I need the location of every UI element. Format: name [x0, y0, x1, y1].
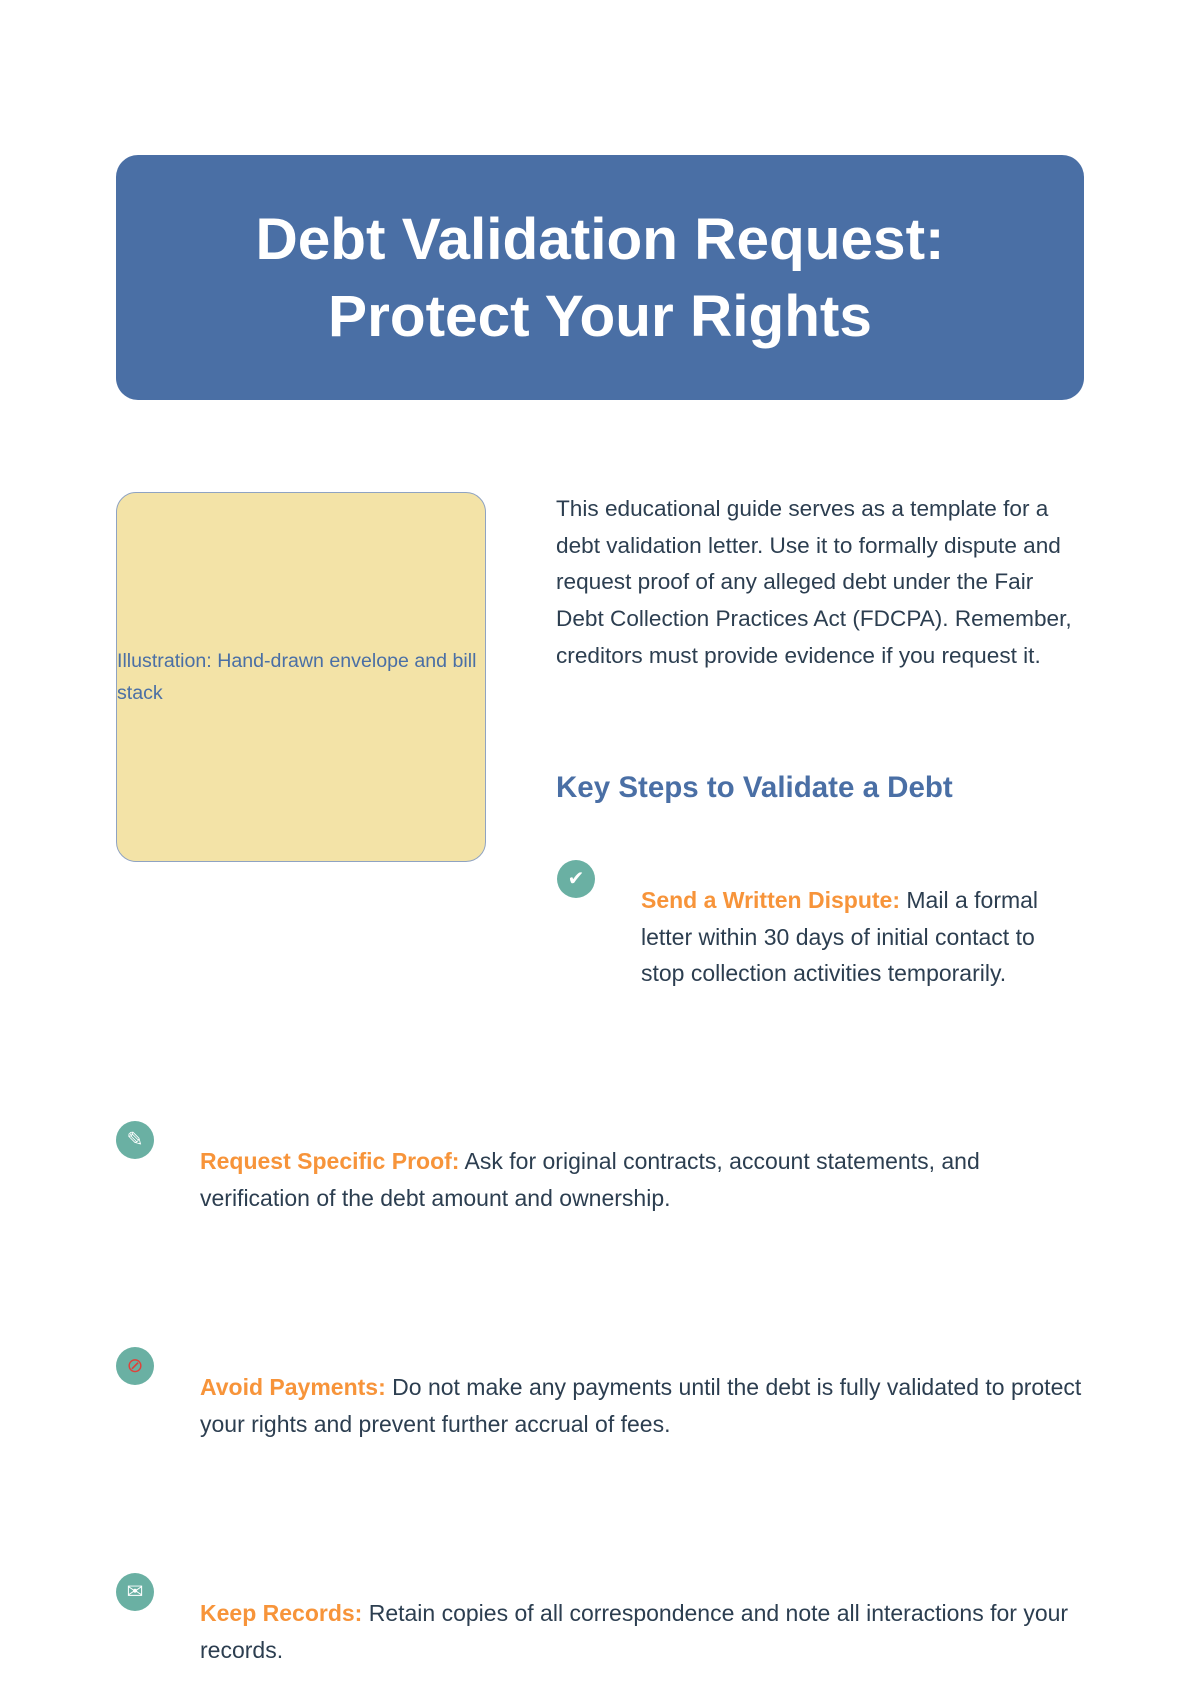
step 3 [116, 1347, 1082, 1437]
intro paragraph: creditors must provide evidence if you request it. [556, 643, 1041, 668]
step 4 text: records. [200, 1637, 283, 1663]
illustration placeholder [116, 492, 486, 862]
title banner [116, 155, 1084, 400]
step 3 text: Avoid Payments: Do not make any payments until the debt is fully validated to protect [200, 1374, 1081, 1400]
step 2 text: verification of the debt amount and ownership. [200, 1185, 671, 1211]
intro paragraph: Debt Collection Practices Act (FDCPA). Remember, [556, 606, 1072, 631]
intro paragraph [556, 496, 1072, 668]
step 4 text: Keep Records: Retain copies of all correspondence and note all interactions for your [200, 1600, 1068, 1626]
icon: no entry: ⊘ [127, 1355, 143, 1377]
intro paragraph: request proof of any alleged debt under the Fair [556, 569, 1033, 594]
icon: no entry [116, 1347, 154, 1385]
step 1 [557, 860, 1038, 986]
heading: key steps: Key Steps to Validate a Debt [556, 771, 953, 804]
step 4 text [200, 1600, 1068, 1663]
step 1 text: letter within 30 days of initial contact to [641, 924, 1035, 950]
step 2 text [200, 1148, 980, 1211]
icon: memo: ✎ [127, 1129, 143, 1151]
step 1 text [641, 887, 1038, 986]
intro paragraph: This educational guide serves as a template for a [556, 496, 1048, 521]
step 2 [116, 1121, 980, 1211]
step 1 text: Send a Written Dispute: Mail a formal [641, 887, 1038, 913]
title banner: Protect Your Rights [328, 284, 872, 348]
step 2 text: Request Specific Proof: Ask for original contracts, account statements, and [200, 1148, 980, 1174]
title banner: Debt Validation Request: [255, 206, 945, 272]
icon: envelope: ✉ [127, 1581, 143, 1603]
step 3 text [200, 1374, 1082, 1437]
step 4 [116, 1573, 1068, 1663]
icon: envelope [116, 1573, 154, 1611]
icon: check: ✔ [568, 868, 584, 890]
icon: check [557, 860, 595, 898]
icon: memo [116, 1121, 154, 1159]
illustration placeholder: Illustration: Hand-drawn envelope and bill stack [117, 650, 476, 704]
intro paragraph: debt validation letter. Use it to formally dispute and [556, 533, 1061, 558]
step 1 text: stop collection activities temporarily. [641, 960, 1006, 986]
step 3 text: your rights and prevent further accrual of fees. [200, 1411, 670, 1437]
